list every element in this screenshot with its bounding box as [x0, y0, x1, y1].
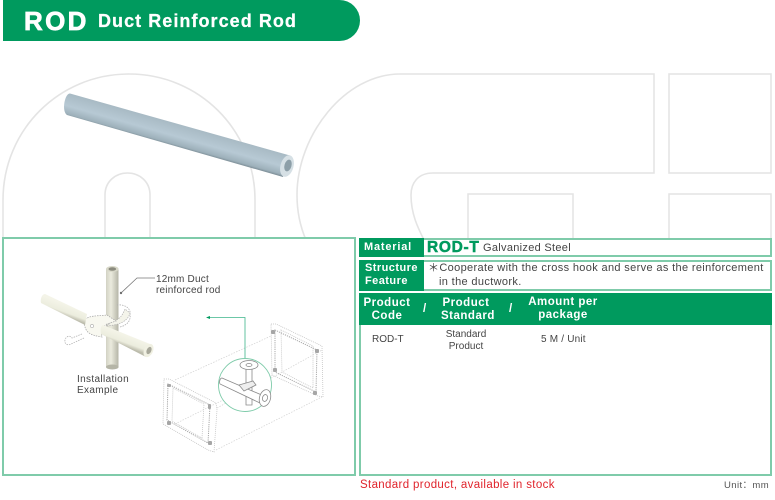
material label: [359, 238, 424, 257]
product title: Duct Reinforced Rod: [98, 11, 297, 31]
column: product code: Product: [364, 297, 410, 309]
separator: /: [423, 303, 427, 315]
label: 12mm duct reinforced rod: reinforced rod: [156, 285, 220, 296]
cell: standard: [446, 329, 486, 352]
row: material: [359, 238, 772, 257]
panel: product table: [359, 293, 772, 476]
header banner: [3, 0, 360, 41]
row: structure feature: [359, 260, 772, 291]
structure feature label: [359, 260, 424, 291]
column: amount per package: [528, 296, 598, 321]
column: product code: Code: [372, 310, 402, 322]
label: installation example: Example: [77, 384, 118, 396]
label: 12mm duct reinforced rod: [156, 274, 220, 296]
material value: Galvanized Steel: [483, 242, 571, 254]
column: product standard: [441, 297, 495, 322]
cell: standard: Standard: [446, 329, 486, 340]
cell: amount: 5 M / Unit: [541, 334, 586, 345]
column: product standard: Product: [443, 297, 489, 309]
column: amount per package: Amount per: [528, 296, 598, 308]
label: installation example: Installation: [77, 374, 129, 384]
column: amount per package: package: [538, 309, 588, 321]
feature description: [428, 262, 764, 288]
cell: standard: Product: [449, 341, 483, 352]
separator: /: [509, 303, 513, 315]
label: installation example: [77, 374, 129, 396]
product code: ROD: [24, 6, 89, 36]
panel: installation example: [2, 237, 356, 476]
table header: [359, 293, 772, 325]
feature description: in the ductwork.: [439, 276, 522, 288]
material label: Material: [364, 241, 412, 253]
product code: ROD-T: [427, 239, 480, 256]
structure feature label: Feature: [365, 275, 408, 287]
note: unit: Unit：mm: [724, 480, 769, 491]
structure feature label: Structure: [365, 262, 418, 274]
column: product standard: Standard: [441, 310, 495, 322]
note: stock availability: Standard product, available in stock: [360, 479, 555, 491]
label: 12mm duct reinforced rod: 12mm Duct: [156, 274, 209, 285]
column: product code: [364, 297, 410, 322]
cell: code: ROD-T: [372, 334, 404, 345]
feature description: ＊Cooperate with the cross hook and serve as the reinforcement: [428, 262, 764, 274]
